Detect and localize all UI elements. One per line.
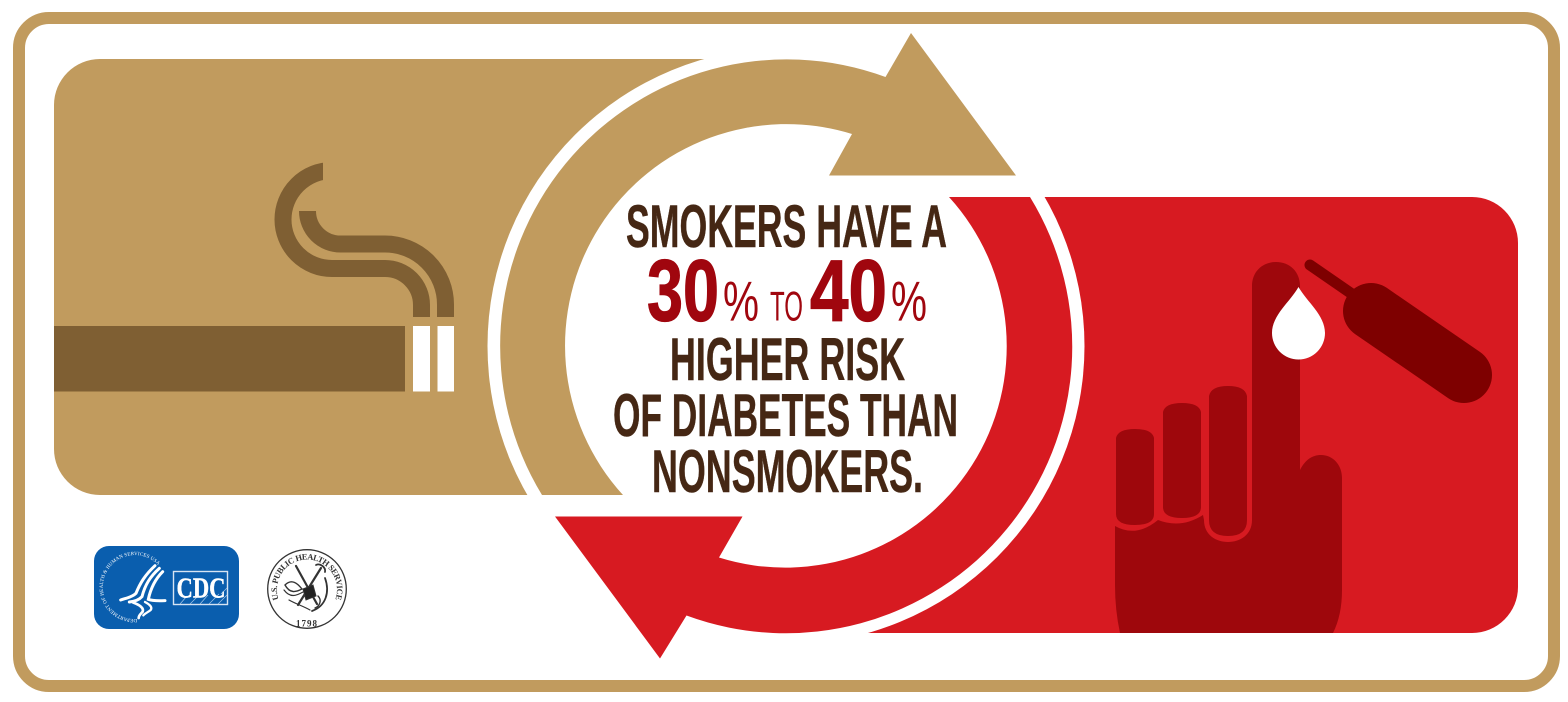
line: higher risk: HIGHER RISK [670,326,905,393]
cigarette body [54,326,405,392]
seal text: U.S. PUBLIC HEALTH SERVICE [271,554,342,601]
statistic: 30% to 40%: % [891,270,927,334]
line: nonsmokers: NONSMOKERS. [652,438,923,505]
blood drop [1272,287,1325,360]
seal emblem [284,564,327,611]
department name circle text: DEPARTMENT OF HEALTH & HUMAN SERVICES USA [99,552,160,622]
smoke trails [283,170,446,317]
logo: US Public Health Service seal [267,549,347,629]
hand palm, index finger and thumb [1115,262,1342,633]
statistic: 30% to 40%: 30 [647,242,719,340]
white circle separating panels from arrows [488,48,1084,644]
CDC box: CDC [176,574,226,604]
logo: HHS and CDC [94,546,239,629]
eagle mark [121,566,165,618]
statistic: 30% to 40% [647,242,927,340]
lancet device [1310,265,1464,375]
logo background [94,546,239,629]
panel: red diabetes panel [786,197,1518,633]
statistic: 30% to 40%: % [723,270,759,334]
icon: cigarette with smoke [54,170,454,392]
statistic: 30% to 40%: TO [770,282,803,330]
line: smokers have a: SMOKERS HAVE A [626,193,947,260]
seal rings [268,550,346,628]
seal text: 1798 [296,618,318,628]
statistic: 30% to 40%: 40 [810,242,887,340]
seal text [271,554,342,628]
folded fingers [1116,386,1247,536]
panel: gold smoking panel [54,59,786,495]
headline text [613,193,958,505]
arrow: gold circular arrow [500,33,1016,495]
line: of diabetes than: OF DIABETES THAN [613,382,958,449]
icon: hand with blood drop and lancet [1115,262,1464,633]
arrow: red circular arrow [555,197,1072,658]
cigarette tip bars [413,326,454,392]
